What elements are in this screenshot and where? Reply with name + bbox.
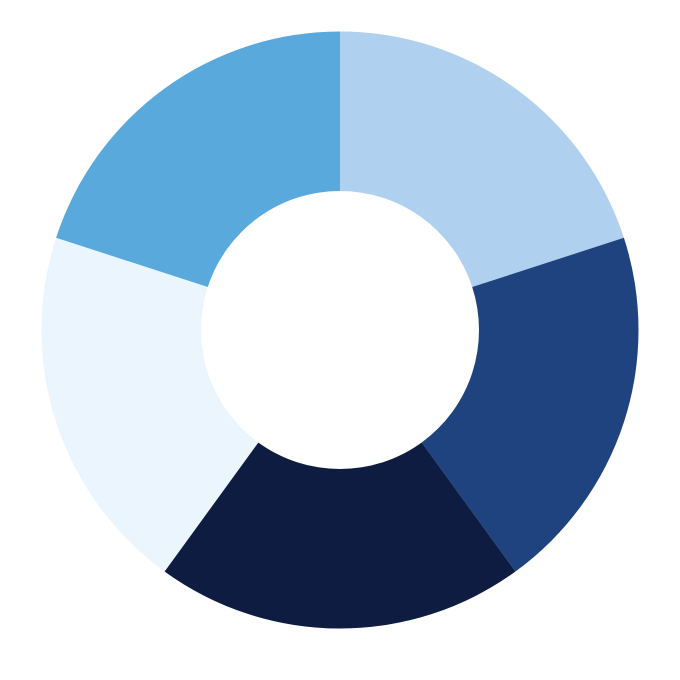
segment 3: dark navy: [165, 442, 515, 628]
segment 2: medium navy: [422, 238, 639, 571]
segment 1: light blue: [340, 31, 624, 287]
segment 5: sky blue: [56, 32, 340, 287]
segment 4: pale blue: [41, 238, 258, 571]
